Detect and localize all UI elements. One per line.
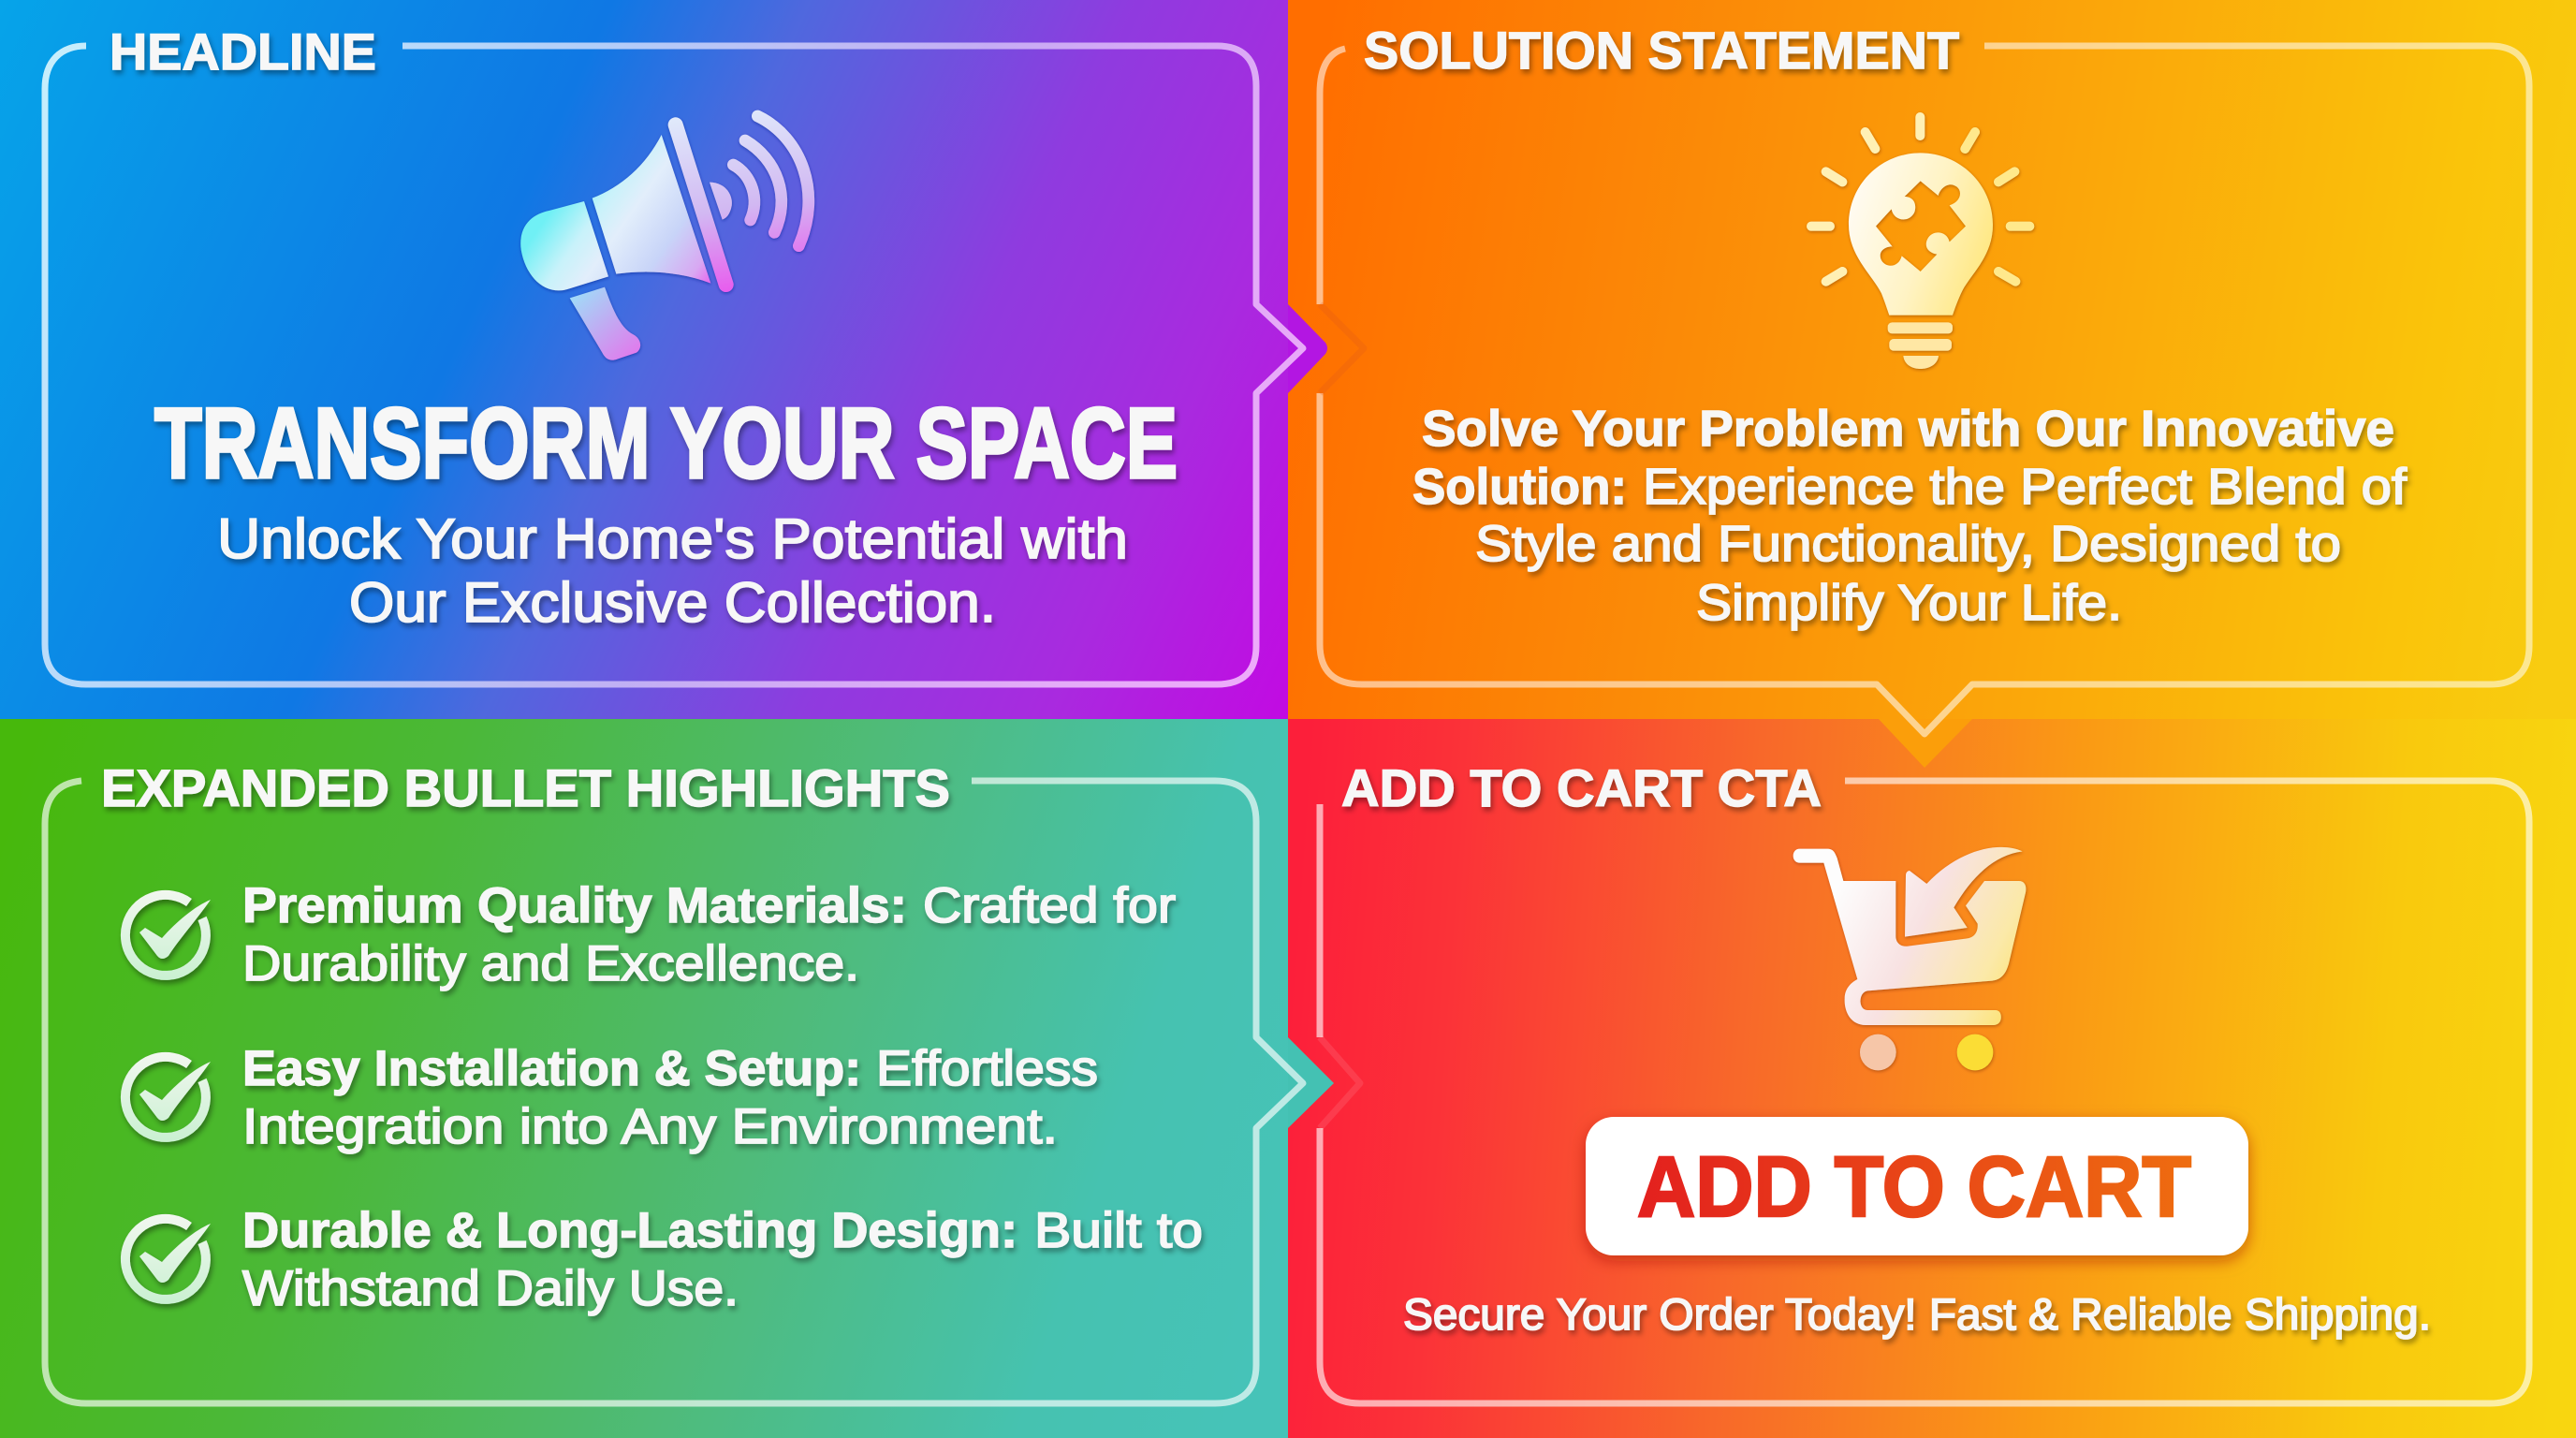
button: add to cart — [1586, 1117, 2248, 1255]
panel frame: headline — [45, 46, 1303, 684]
panel frame: bullets — [45, 781, 1303, 1403]
connector arrow: solution to cart — [1879, 719, 1972, 768]
text: solution description: Simplify Your Life. — [1696, 575, 2122, 631]
panel: headline — [0, 0, 1327, 719]
text: solution description — [1412, 401, 2408, 631]
text: solution description: Style and Functionality, Designed to — [1475, 516, 2341, 572]
text: premium quality materials: Premium Quality Materials: — [242, 878, 907, 933]
icon: check mark — [125, 895, 211, 976]
panel: solution statement — [1288, 0, 2576, 768]
text: headline subtitle: Unlock Your Home's Potential with — [217, 507, 1128, 570]
button: add to cart: ADD TO CART — [1637, 1139, 2191, 1235]
heading: add to cart cta: ADD TO CART CTA — [1341, 758, 1822, 817]
icon: check mark — [125, 1219, 211, 1299]
text: easy installation and setup: Easy Installation & Setup: — [242, 1041, 861, 1096]
panel frame: add to cart — [1320, 781, 2529, 1403]
title: transform your space: TRANSFORM YOUR SPACE — [154, 387, 1178, 499]
panel: expanded bullet highlights — [0, 719, 1334, 1438]
connector arrow: headline to solution — [1288, 304, 1327, 393]
bullet item: durable and long-lasting design — [125, 1203, 1203, 1316]
text: solution description: Solve Your Problem with Our Innovative — [1422, 401, 2394, 457]
panel frame: solution — [1320, 46, 2529, 734]
text: easy installation and setup — [242, 1041, 1098, 1154]
text: premium quality materials: Durability and Excellence. — [242, 936, 859, 991]
faint chevron: add to cart frame — [1320, 1037, 1360, 1128]
text: premium quality materials: Crafted for — [923, 878, 1176, 933]
icon: shopping cart with arrow — [1793, 847, 2026, 1070]
heading: solution statement: SOLUTION STATEMENT — [1364, 21, 1959, 80]
text: premium quality materials — [242, 878, 1176, 991]
faint chevron: solution frame — [1320, 304, 1364, 393]
text: headline subtitle: Our Exclusive Collection. — [349, 571, 996, 634]
text: headline subtitle — [217, 507, 1128, 634]
text: easy installation and setup: Integration into Any Environment. — [242, 1099, 1058, 1154]
bullet item: premium quality materials — [125, 878, 1176, 991]
icon: check mark — [125, 1057, 211, 1137]
text: durable and long-lasting design: Withstand Daily Use. — [242, 1261, 739, 1316]
panel: add to cart CTA — [1288, 719, 2576, 1438]
heading: headline: HEADLINE — [110, 22, 376, 81]
text: durable and long-lasting design: Built to — [1034, 1203, 1203, 1258]
text: shipping note: Secure Your Order Today! Fast & Reliable Shipping. — [1403, 1289, 2431, 1339]
icon: megaphone with sound waves — [520, 116, 809, 360]
text: solution description: Solution: — [1412, 459, 1627, 515]
bullet item: easy installation and setup — [125, 1041, 1098, 1154]
connector arrow: bullets to cart — [1288, 1037, 1334, 1128]
text: durable and long-lasting design: Durable & Long-Lasting Design: — [242, 1203, 1017, 1258]
text: durable and long-lasting design — [242, 1203, 1203, 1316]
text: solution description: Experience the Perfect Blend of — [1643, 459, 2408, 515]
heading: expanded bullet highlights: EXPANDED BULLET HIGHLIGHTS — [101, 758, 950, 817]
icon: light bulb with puzzle piece — [1811, 117, 2029, 369]
text: easy installation and setup: Effortless — [876, 1041, 1098, 1096]
